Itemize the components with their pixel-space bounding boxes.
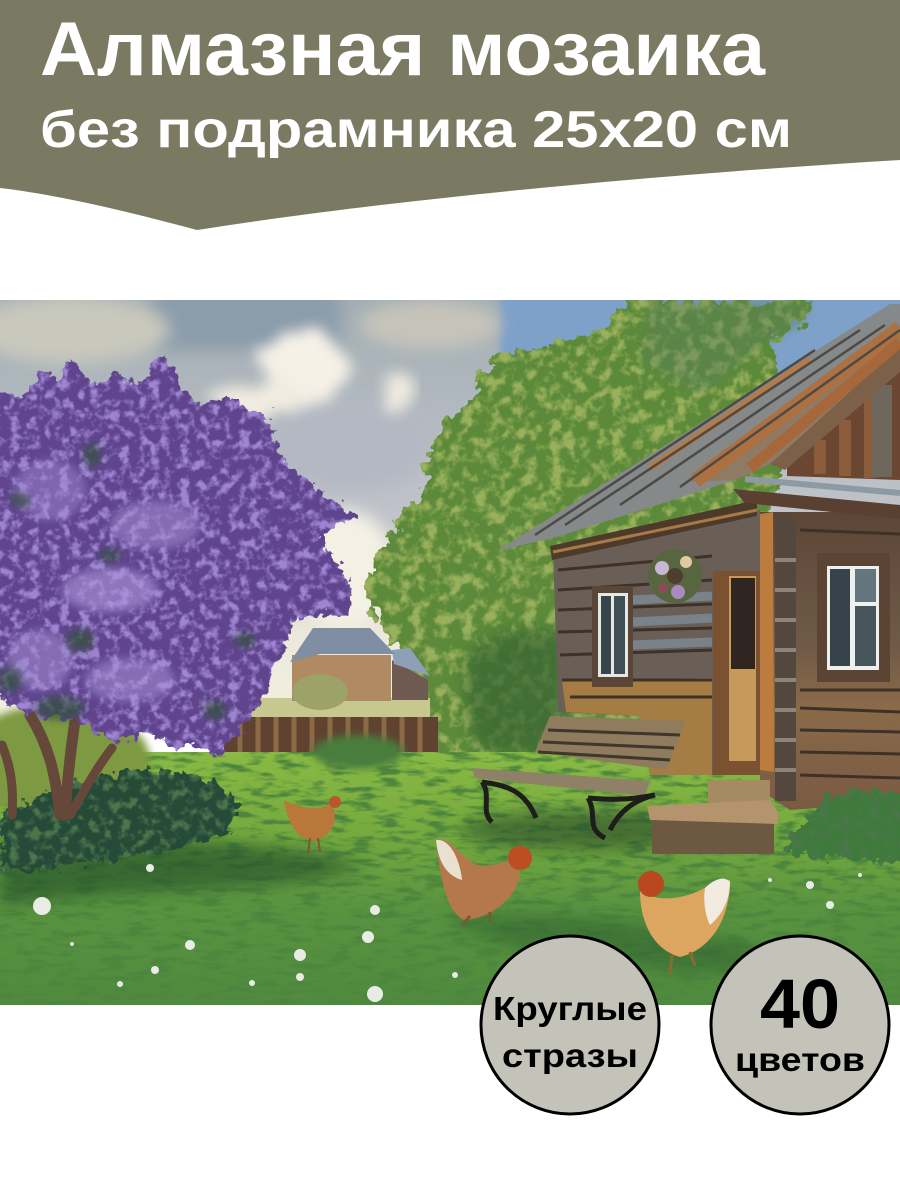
porch steps (647, 780, 778, 854)
badge: round rhinestones: стразы (502, 1037, 638, 1074)
dark bushes under lilac (0, 705, 404, 870)
badge: round rhinestones: Круглые (493, 990, 647, 1027)
painting: country house with lilac and chickens (0, 285, 900, 1005)
chicken: right (638, 871, 730, 974)
lilac bush (0, 353, 355, 757)
badge: round rhinestones (481, 936, 659, 1114)
badge: 40 colours: цветов (735, 1041, 865, 1078)
lilac trunk (2, 700, 112, 815)
wreath (648, 549, 702, 603)
white flowers (33, 864, 862, 1002)
chicken: middle (436, 839, 532, 925)
badge: 40 colours (711, 936, 889, 1114)
bench (472, 716, 685, 838)
title: main heading: Алмазная мозаика (40, 7, 766, 92)
title: subtitle: без подрамника 25х20 см (40, 101, 792, 159)
gutter (745, 479, 900, 493)
badge: 40 colours: 40 (760, 965, 840, 1043)
lilac blossom clusters and leaves (0, 443, 256, 720)
distant house (250, 628, 430, 717)
lawn shadows (0, 810, 800, 972)
right window (817, 553, 890, 682)
house roof (497, 304, 900, 551)
wooden fence (224, 717, 438, 752)
sky with clouds (0, 285, 900, 730)
grass meadow (0, 752, 900, 1005)
door (713, 571, 760, 775)
house gable (770, 346, 900, 480)
title banner (0, 0, 900, 230)
chicken: small (284, 796, 341, 854)
house walls (550, 489, 900, 810)
left window (592, 586, 633, 687)
bush near porch (785, 790, 900, 862)
background green trees (368, 300, 810, 780)
